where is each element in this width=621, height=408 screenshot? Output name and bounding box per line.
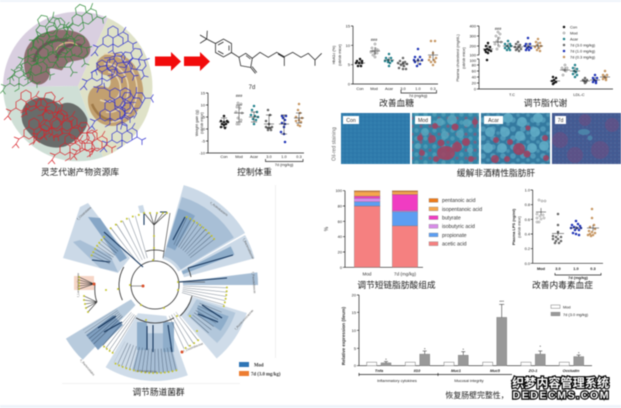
clade labels: f_Bacteroidaceae xyxy=(242,238,255,260)
chart: weight gain xyxy=(194,90,304,167)
y title: Plasma cholesterol (mg/dL) xyxy=(455,34,460,82)
gene labels xyxy=(375,368,580,373)
x labels: Mod xyxy=(370,86,378,91)
legend: propionate xyxy=(442,233,467,239)
dose label: 7d (mg/kg) xyxy=(409,93,428,98)
micrograph: 7d xyxy=(552,113,621,164)
chart: plasma cholesterol xyxy=(455,24,613,97)
x tick labels: 3.0 xyxy=(266,154,273,159)
significance: * xyxy=(463,347,465,352)
panel: cladogram xyxy=(63,185,258,381)
x tick labels xyxy=(220,154,302,159)
axes xyxy=(206,93,304,153)
x labels: Mod xyxy=(537,266,546,271)
error bars xyxy=(483,37,610,82)
bar: 7d xyxy=(392,191,418,267)
y ticks: 5 xyxy=(348,62,350,67)
y tick labels: 5 xyxy=(203,114,205,120)
legend xyxy=(564,24,596,60)
caption: lipid metabolism: 调节脂代谢 xyxy=(524,97,568,108)
panel: Ganoderma metabolite library xyxy=(0,0,160,164)
category labels: Inflammatory cytokines xyxy=(377,378,417,383)
molecules: red xyxy=(4,85,116,164)
y ticks: 20 xyxy=(472,80,477,86)
y ticks: 15 xyxy=(352,310,356,315)
caption: library: 灵芝代谢产物资源库 xyxy=(41,166,119,177)
gene labels: Tnfa xyxy=(375,368,384,373)
clade labels xyxy=(76,201,257,377)
y title: Weight gain (g) xyxy=(194,109,199,136)
legend: 7d (3.0 mg/kg) xyxy=(563,312,589,317)
sector: purple xyxy=(3,12,108,87)
x labels: LDL-C xyxy=(573,92,585,97)
y ticks: 20 xyxy=(352,292,357,298)
dose bracket xyxy=(266,159,303,162)
y title: % xyxy=(324,226,330,231)
mushroom: grey-black xyxy=(22,98,87,148)
error bars xyxy=(355,47,438,67)
watermark: 织梦内容管理系统 xyxy=(512,375,609,390)
category bracket xyxy=(359,373,512,376)
legend: isopentanoic acid xyxy=(442,207,482,213)
tag xyxy=(343,116,359,124)
y tick labels xyxy=(199,90,206,156)
y subtitle: (ob/ob mice) xyxy=(516,215,522,238)
y title: HbA1c (%) xyxy=(331,45,336,64)
x tick labels: Mod xyxy=(235,154,243,159)
legend: 7d (3.0 mg/kg) xyxy=(570,42,596,48)
y ticks: 100 xyxy=(470,52,477,58)
wedge: lower left xyxy=(66,299,136,360)
y ticks xyxy=(352,292,357,368)
points xyxy=(356,59,362,66)
y ticks: 80 xyxy=(338,204,343,208)
axes xyxy=(531,190,603,263)
y ticks: 300 xyxy=(470,34,477,38)
legend: isobutyric acid xyxy=(442,224,475,230)
label: 7d: 7d xyxy=(249,85,255,91)
watermark: DEDECMS.COM xyxy=(512,390,609,402)
mushroom: golden-brown xyxy=(88,53,143,126)
y subtitle: (ob/ob mice) xyxy=(461,46,466,69)
y ticks: 0 xyxy=(340,265,343,270)
points xyxy=(221,116,228,128)
significance: ### xyxy=(371,37,378,42)
dose label: 7d (mg/kg) xyxy=(275,162,294,167)
clade labels: Lachnospiraceae xyxy=(135,369,157,373)
legend xyxy=(429,198,482,248)
sector: teal xyxy=(3,86,103,161)
points xyxy=(485,43,556,84)
y title: Plasma LPS (ng/ml) xyxy=(511,208,516,245)
category labels: Mucosal integrity xyxy=(454,378,484,383)
y ticks: 10 xyxy=(352,328,357,333)
significance: * xyxy=(424,346,426,352)
x labels: Con xyxy=(356,86,364,91)
dose label: 7d (mg/kg) xyxy=(568,275,589,280)
tag text: Acar xyxy=(488,118,499,124)
label: Oil-red staining: Oil-red staining xyxy=(332,127,338,161)
tag text: Con xyxy=(346,118,356,124)
clade labels: f_Lactobacillaceae xyxy=(76,273,80,297)
x labels: 3.0 xyxy=(555,266,561,271)
y ticks: 0.0 xyxy=(525,261,531,266)
axes xyxy=(357,295,592,366)
x labels: T.C xyxy=(509,92,515,97)
caption: gut microbiota: 调节肠道菌群 xyxy=(132,386,185,397)
gene labels: Il10 xyxy=(414,368,421,373)
y ticks xyxy=(336,188,343,270)
y subtitle: (ob/ob mice) xyxy=(337,43,342,66)
y tick labels: 15 xyxy=(201,90,205,96)
concentric rings xyxy=(95,250,192,323)
significance: *** xyxy=(499,299,504,304)
highlighted clades xyxy=(92,212,233,352)
wedge: upper right xyxy=(162,185,245,272)
y ticks: 80 xyxy=(472,62,477,68)
clade labels: f_Clostridiales xyxy=(76,205,93,221)
top band xyxy=(0,0,621,2)
tag text: Mod xyxy=(418,118,428,124)
molecule 7d xyxy=(200,31,322,74)
chart: SCFA stacked bars xyxy=(324,188,482,276)
x labels: Acar xyxy=(385,86,394,91)
tag text: 7d xyxy=(558,118,563,124)
legend: 7d (1.0 mg/kg) xyxy=(570,48,596,54)
x tick labels: Con xyxy=(220,154,228,159)
caption: blood glucose: 改善血糖 xyxy=(379,97,414,108)
x labels: 0.3 xyxy=(430,86,436,91)
clade labels: f_Clostridiaceae xyxy=(183,341,204,353)
arrow 2 xyxy=(184,52,210,71)
wedge: right narrow xyxy=(181,235,254,277)
y ticks: 0 xyxy=(354,363,357,368)
significance: * xyxy=(385,357,387,362)
legend: cladogram: 7d (3.0 mg/kg) xyxy=(251,372,281,378)
legend: cladogram: Mod xyxy=(254,364,264,368)
x labels: 1.0 xyxy=(415,86,422,91)
clade labels: f_Prevotellaceae xyxy=(251,272,257,294)
caption: fatty liver: 缓解非酒精性脂肪肝 xyxy=(457,167,535,178)
watermark xyxy=(512,375,609,402)
chart: gene expression xyxy=(341,292,592,383)
significance: * xyxy=(540,344,542,349)
y ticks: 10 xyxy=(346,43,351,48)
bar: Mod xyxy=(354,191,380,267)
y ticks: 0.4 xyxy=(525,232,531,236)
caption: SCFA composition: 调节短链脂肪酸组成 xyxy=(357,279,436,290)
y ticks xyxy=(525,188,531,266)
frame lines xyxy=(62,185,276,384)
axes xyxy=(351,26,438,84)
micrograph: Mod xyxy=(412,113,479,164)
y tick labels: 10 xyxy=(201,102,206,108)
y ticks: 0 xyxy=(348,82,351,86)
highlight: red clade xyxy=(74,276,94,290)
y ticks: 200 xyxy=(470,44,477,48)
y ticks: 60 xyxy=(472,68,477,74)
gene labels: Muc5 xyxy=(490,368,501,373)
significance: * xyxy=(578,350,580,356)
wedge: bottom xyxy=(106,313,188,381)
x labels: Mod xyxy=(363,272,372,276)
legend: pentanoic acid xyxy=(442,198,476,204)
significance xyxy=(385,299,580,362)
axes xyxy=(343,191,423,267)
wedge: lower right xyxy=(181,297,247,358)
axes xyxy=(477,26,613,89)
y tick labels: 0 xyxy=(203,126,206,132)
caption: barrier integrity: 恢复肠壁完整性， xyxy=(445,390,509,400)
bottom band xyxy=(0,405,621,408)
x tick labels: 0.3 xyxy=(296,154,302,159)
7d bars xyxy=(381,317,584,366)
wedge: right xyxy=(183,272,258,285)
legend: cladogram xyxy=(239,362,281,378)
dose bracket xyxy=(401,90,436,93)
mushroom: purple-brown xyxy=(24,30,90,85)
significance: ### xyxy=(495,26,502,31)
legend: 7d (0.3 mg/kg) xyxy=(570,54,596,60)
dose bracket xyxy=(555,273,601,275)
error bars xyxy=(219,105,304,134)
caption: weight control: 控制体重 xyxy=(237,166,272,177)
clade labels: o_Bacteroidales xyxy=(79,358,96,377)
x tick labels: 1.0 xyxy=(281,154,288,159)
error bars xyxy=(384,304,581,363)
clade labels: f_Ruminococcaceae xyxy=(234,308,255,331)
x labels: 3.0 xyxy=(400,86,407,91)
gene labels: Muc1 xyxy=(451,368,461,373)
sector: yellow-green xyxy=(78,18,152,157)
clade labels: c_Actinobacteria xyxy=(209,201,229,217)
molecules: blue xyxy=(80,26,160,152)
y ticks: 0 xyxy=(474,86,477,92)
y ticks: 5 xyxy=(354,346,356,351)
y ticks: 100 xyxy=(470,58,477,63)
y tick labels: -5 xyxy=(202,138,205,144)
molecules: green xyxy=(0,0,109,94)
y ticks xyxy=(346,24,351,86)
x labels: 0.3 xyxy=(590,266,597,271)
y ticks: 60 xyxy=(338,219,343,224)
y title: Relative expression (Ileum) xyxy=(341,306,346,365)
chart: plasma LPS xyxy=(511,188,603,280)
y ticks: 15 xyxy=(346,24,350,28)
y subtitle: (ob/ob mice) xyxy=(199,111,204,134)
micrograph: Con xyxy=(341,113,410,164)
x labels xyxy=(537,266,597,271)
tag xyxy=(415,116,431,124)
y ticks: 20 xyxy=(338,250,343,254)
x labels xyxy=(363,272,416,276)
arrow 1 xyxy=(155,52,181,71)
y ticks: 100 xyxy=(336,188,343,193)
y ticks: 0.8 xyxy=(525,202,530,207)
legend: acetic acid xyxy=(442,242,467,248)
legend: Con xyxy=(570,24,577,30)
y ticks: 0.6 xyxy=(525,217,530,222)
tag xyxy=(555,116,566,124)
y ticks: 1.0 xyxy=(525,188,531,192)
points xyxy=(537,200,545,222)
red nodes xyxy=(94,284,182,352)
legend: Acar xyxy=(570,36,579,42)
gene labels: ZO-1 xyxy=(528,368,537,373)
y tick labels: -10 xyxy=(199,150,206,156)
legend xyxy=(551,304,589,317)
y ticks: 40 xyxy=(338,234,343,239)
mean bars xyxy=(536,208,599,236)
y ticks: 40 xyxy=(472,74,477,80)
legend: Mod xyxy=(563,304,571,309)
x tick labels: Acar xyxy=(250,154,259,159)
category labels xyxy=(377,378,484,383)
y ticks: 400 xyxy=(470,24,477,28)
y ticks xyxy=(470,24,477,92)
x labels: 1.0 xyxy=(573,266,579,271)
x labels xyxy=(509,92,585,97)
Mod bars xyxy=(367,362,569,366)
gene labels: Occludin xyxy=(563,368,580,373)
tag xyxy=(484,116,503,124)
legend: Mod xyxy=(570,30,578,36)
y ticks: 0.2 xyxy=(525,246,530,251)
caption: endotoxemia: 改善内毒素血症 xyxy=(532,279,593,290)
x labels: 7d (mg/kg) xyxy=(394,272,416,276)
tip nodes xyxy=(79,213,227,373)
wedge: top small xyxy=(138,205,145,213)
wedge: upper left xyxy=(63,203,130,273)
chart: HbA1c xyxy=(331,24,438,98)
significance: ### xyxy=(236,93,243,98)
legend: butyrate xyxy=(442,216,461,222)
radial tree branches xyxy=(79,213,211,361)
micrograph: Acar xyxy=(481,113,550,164)
x labels xyxy=(356,86,436,91)
